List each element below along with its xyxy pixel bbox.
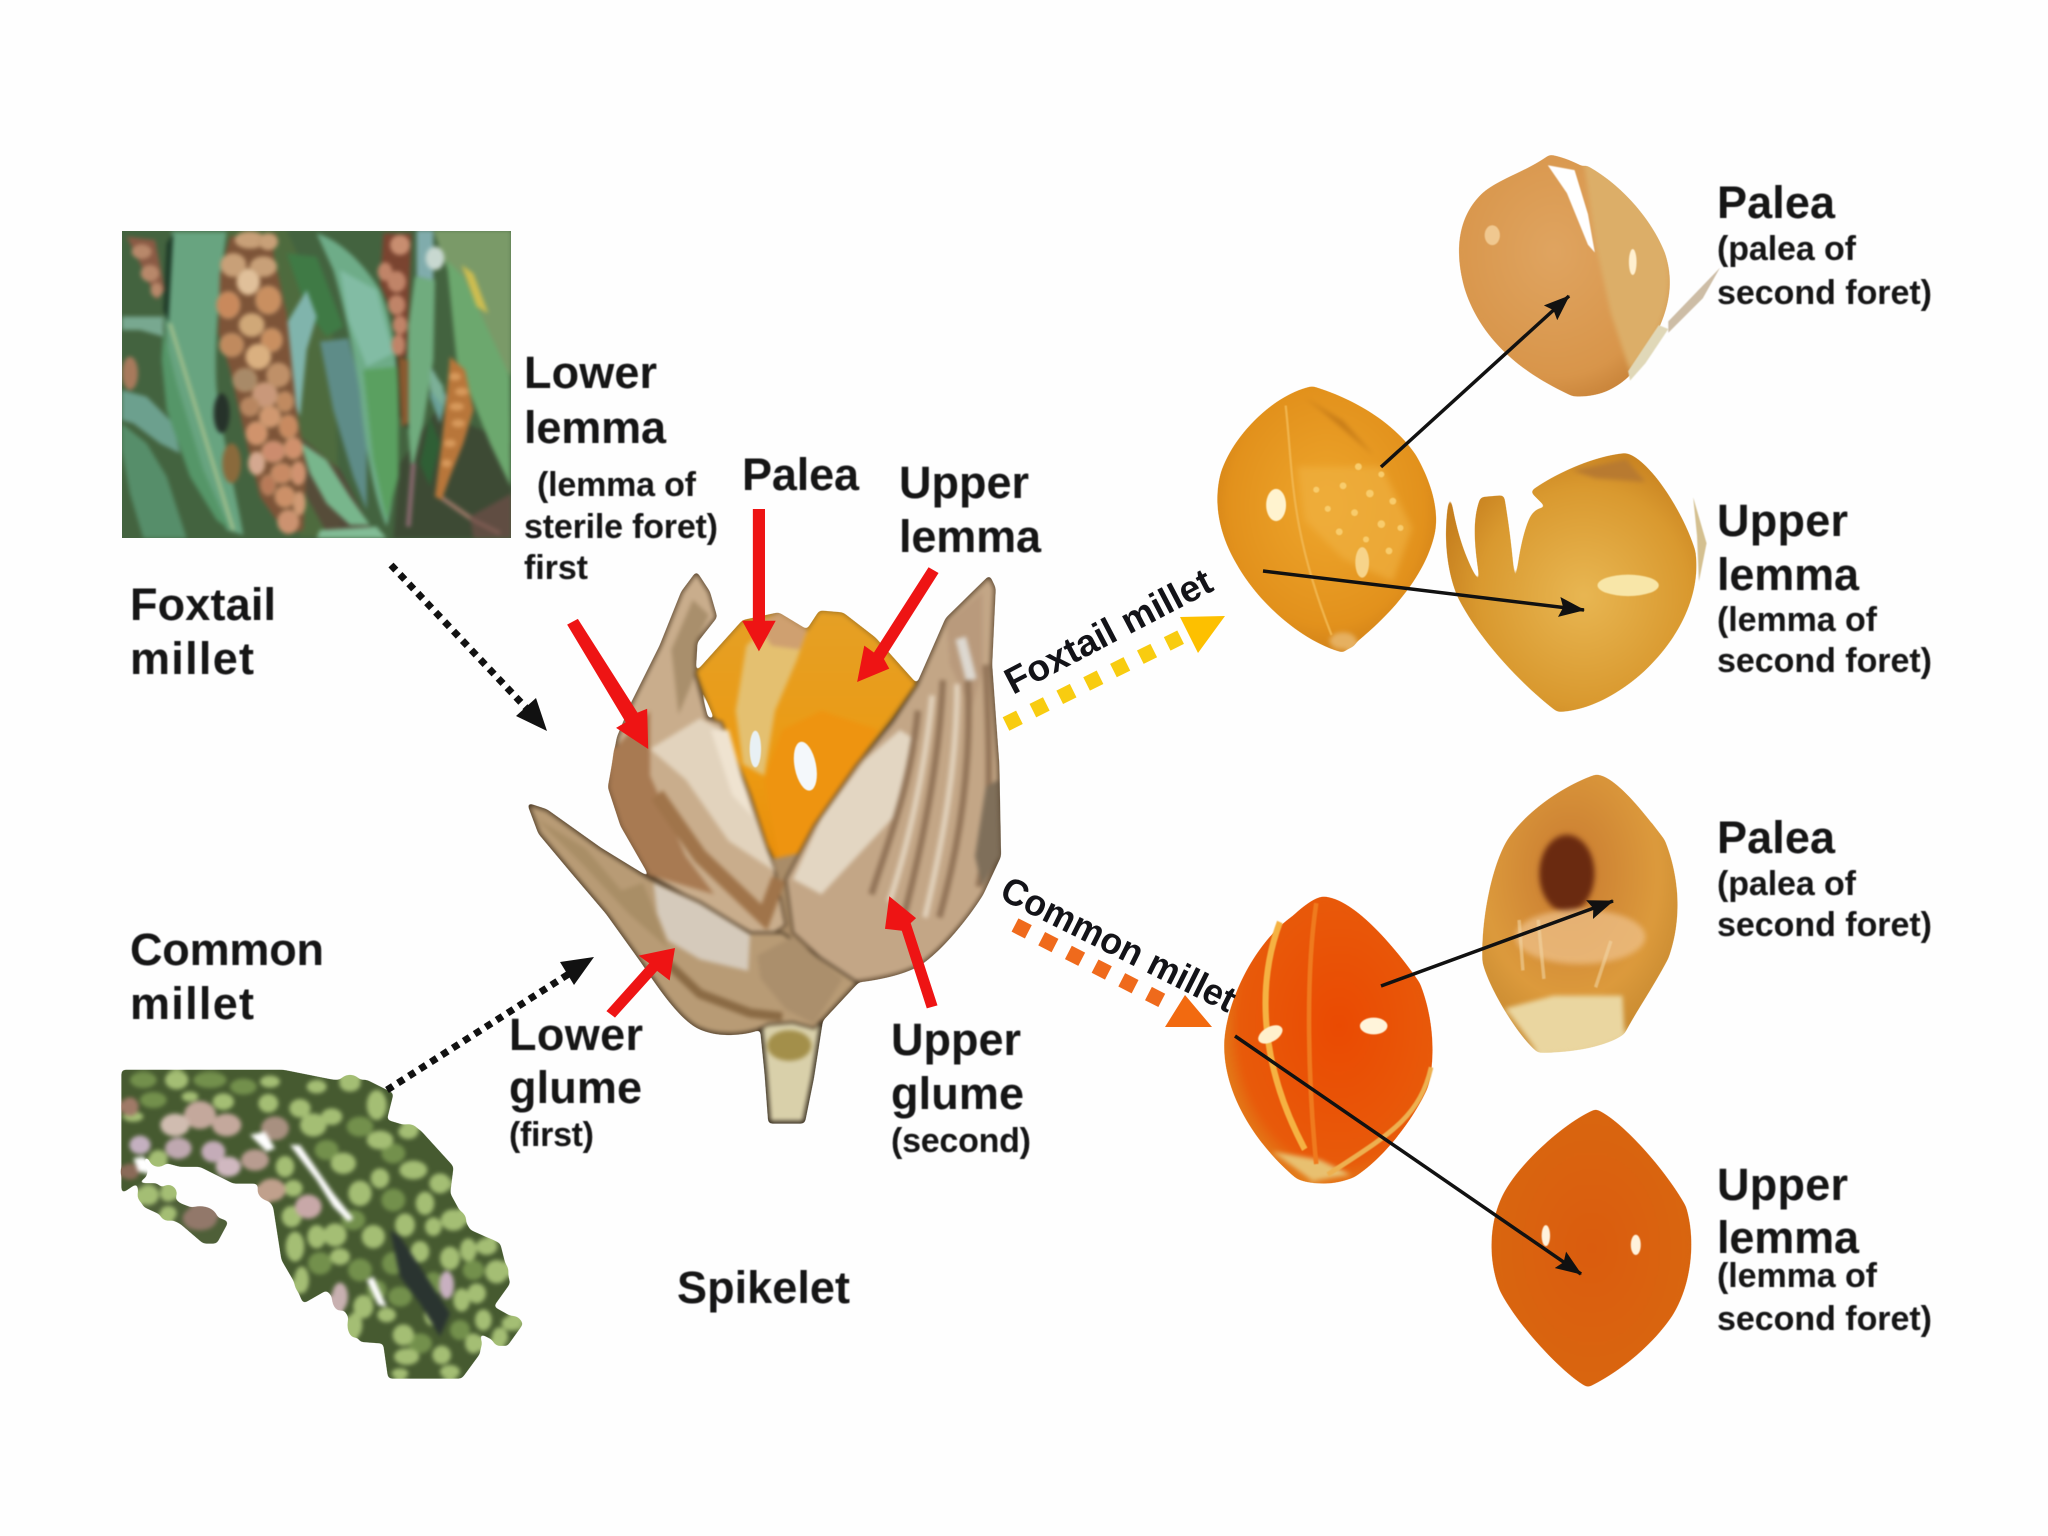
label: upper lemma common: lemma (1717, 1212, 1860, 1263)
label: upper glume (891, 1014, 1031, 1160)
label: upper lemma foxtail: lemma (1717, 549, 1860, 600)
label: upper glume: (second) (891, 1122, 1031, 1160)
black arrow: common grain to upper lemma (1235, 1036, 1581, 1274)
label: palea foxtail: (palea of (1717, 230, 1857, 268)
label: lower lemma: lemma (524, 402, 667, 453)
label: palea common: Palea (1717, 812, 1836, 863)
red arrow: upper lemma (857, 567, 939, 682)
label: palea: Palea (742, 449, 860, 500)
main panicle (218, 233, 307, 535)
label: upper lemma foxtail: (lemma of (1717, 601, 1878, 639)
label: palea common: (palea of (1717, 865, 1857, 903)
black arrow: foxtail grain to upper lemma (1263, 571, 1584, 610)
label: common millet: millet (130, 978, 254, 1029)
label: common millet (130, 924, 324, 1029)
spikelet illustration (529, 573, 1000, 1122)
dashed orange arrow: common millet (1015, 925, 1212, 1027)
lower glume bract (529, 804, 857, 1034)
label: foxtail millet arrow: Foxtail millet (998, 560, 1219, 702)
label: foxtail millet: Foxtail (130, 579, 276, 630)
label: upper lemma: Upper (899, 457, 1029, 508)
label: lower lemma (524, 347, 718, 587)
label: lower lemma: first (524, 549, 588, 587)
stalk (761, 1021, 821, 1122)
label: palea common: second foret) (1717, 906, 1932, 944)
label: upper lemma foxtail: second foret) (1717, 642, 1932, 680)
red arrow: palea (742, 509, 776, 651)
photo: foxtail millet plant (113, 223, 520, 547)
right panicle (435, 357, 473, 500)
orange caryopsis (696, 611, 916, 877)
label: common millet arrow: Common millet (994, 868, 1243, 1020)
common grain: upper lemma (1492, 1109, 1691, 1387)
label: palea foxtail (1717, 177, 1932, 312)
label: lower lemma: (lemma of (537, 466, 697, 504)
black arrow: common grain to palea (1381, 901, 1613, 986)
lower lemma bract (609, 573, 786, 940)
label: palea common (1717, 812, 1932, 944)
left panicles (127, 237, 165, 300)
foxtail grain: upper lemma (1446, 453, 1707, 712)
label: upper glume: Upper (891, 1014, 1021, 1065)
label: upper lemma: lemma (899, 511, 1042, 562)
foxtail grain: palea (1459, 155, 1720, 396)
base filler (750, 848, 839, 971)
label: upper glume: glume (891, 1068, 1024, 1119)
common grain: whole (1224, 897, 1432, 1183)
photo: common millet panicle (121, 1070, 523, 1378)
label: lower glume: (first) (509, 1116, 594, 1154)
label: upper lemma common: Upper (1717, 1159, 1848, 1210)
main leaf left (164, 232, 243, 535)
red arrow: upper glume (885, 896, 937, 1008)
label: upper lemma (899, 457, 1042, 562)
label: palea foxtail: Palea (1717, 177, 1836, 228)
common grain: palea (1483, 775, 1677, 1053)
label: palea foxtail: second foret) (1717, 274, 1932, 312)
label: common millet: Common (130, 924, 324, 975)
centre leaf (317, 233, 398, 527)
dashed yellow arrow: foxtail millet (1006, 616, 1225, 724)
foxtail grain: whole (1218, 386, 1436, 652)
label: lower glume: glume (509, 1062, 642, 1113)
dotted arrow: common millet photo to spikelet (387, 957, 594, 1090)
red arrow: lower lemma (567, 619, 648, 749)
label: lower glume (509, 1009, 643, 1154)
label: lower lemma: sterile foret) (524, 508, 718, 546)
label: spikelet: Spikelet (677, 1262, 850, 1313)
dotted arrow: foxtail photo to spikelet (391, 565, 547, 731)
label: upper lemma foxtail: Upper (1717, 495, 1848, 546)
right upright leaf (407, 277, 435, 473)
label: upper lemma common (1717, 1159, 1932, 1338)
secondary panicle (380, 233, 412, 357)
label: upper lemma common: second foret) (1717, 1300, 1932, 1338)
red arrow: lower glume (606, 948, 675, 1018)
black arrow: foxtail grain to palea (1381, 296, 1569, 467)
label: upper lemma foxtail (1717, 495, 1932, 680)
label: lower glume: Lower (509, 1009, 643, 1060)
label: foxtail millet: millet (130, 633, 254, 684)
label: foxtail millet (130, 579, 276, 684)
label: lower lemma: Lower (524, 347, 657, 398)
upper glume bract (786, 577, 1000, 982)
label: upper lemma common: (lemma of (1717, 1257, 1878, 1295)
